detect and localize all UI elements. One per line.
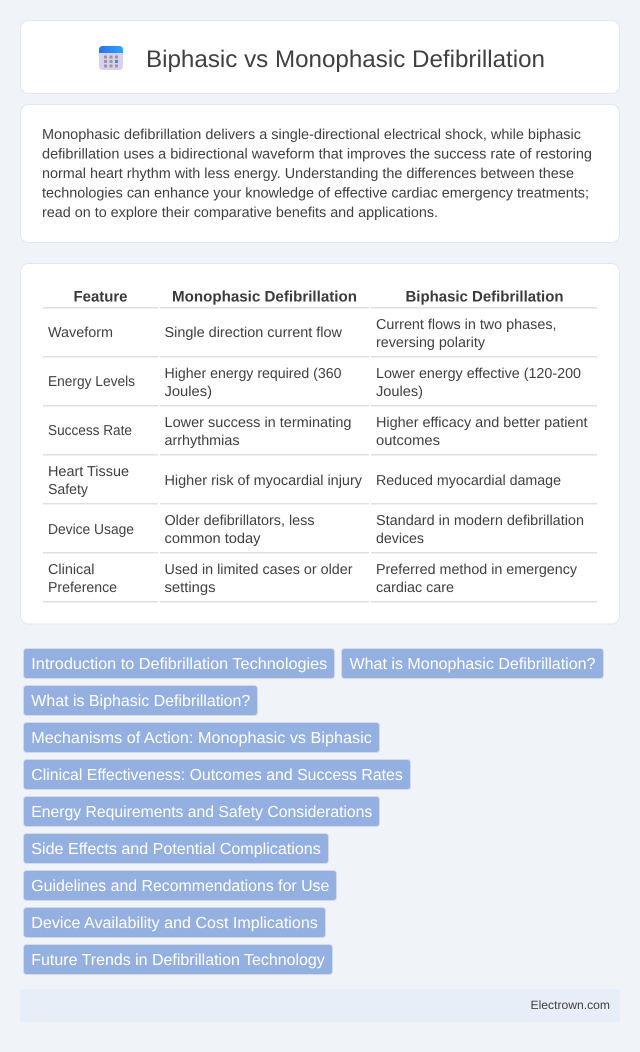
title: Biphasic vs Monophasic Defibrillation <box>146 46 545 73</box>
row: device usage: common today <box>164 531 261 547</box>
intro paragraph: Monophasic defibrillation delivers a single-directional electrical shock, while biphasic <box>42 127 581 143</box>
row: energy levels: Joules) <box>376 384 423 400</box>
chip: future trends <box>24 944 332 974</box>
chip: monophasic: What is Monophasic Defibrillation? <box>350 656 596 673</box>
row: device usage: Device Usage <box>48 522 134 538</box>
row: energy levels: Energy Levels <box>48 374 135 390</box>
row: waveform: Current flows in two phases, <box>376 317 556 333</box>
chip: clinical effectiveness <box>24 760 410 790</box>
chip: mechanisms <box>24 722 380 752</box>
row: success rate: Lower success in terminating <box>164 415 352 431</box>
row: success rate: Success Rate <box>48 423 132 439</box>
row: clinical preference: Preference <box>48 580 117 596</box>
intro paragraph: normal heart rhythm with less energy. Understanding the differences between these <box>42 166 574 182</box>
chip: biphasic: What is Biphasic Defibrillation? <box>31 693 250 710</box>
row: heart tissue safety: Higher risk of myocardial injury <box>164 473 363 489</box>
table header row <box>43 288 597 308</box>
row: waveform: Single direction current flow <box>164 325 343 341</box>
chip: device availability: Device Availability and Cost Implications <box>31 915 318 932</box>
chip: energy requirements <box>24 796 380 826</box>
row: success rate: outcomes <box>376 433 440 449</box>
row: clinical preference: cardiac care <box>376 580 454 596</box>
row: clinical preference: settings <box>164 580 216 596</box>
chip: clinical effectiveness: Clinical Effectiveness: Outcomes and Success Rates <box>31 767 403 784</box>
chip: device availability <box>24 908 326 938</box>
chip: introduction: Introduction to Defibrillation Technologies <box>31 656 327 673</box>
chip: energy requirements: Energy Requirements and Safety Considerations <box>31 804 372 821</box>
table header row: Feature <box>74 288 128 306</box>
row: energy levels: Lower energy effective (120-200 <box>376 366 581 382</box>
chip: guidelines <box>24 870 336 900</box>
row: clinical preference: Clinical <box>48 562 94 578</box>
row: waveform <box>43 317 597 358</box>
chip: guidelines: Guidelines and Recommendations for Use <box>31 878 329 895</box>
row: success rate: Higher efficacy and better patient <box>376 415 588 431</box>
row: heart tissue safety <box>43 464 597 504</box>
row: success rate <box>43 415 597 456</box>
row: energy levels: Higher energy required (360 <box>164 366 342 382</box>
row: success rate: arrhythmias <box>164 433 240 449</box>
topic chips <box>24 648 604 974</box>
intro text panel <box>20 104 620 242</box>
table header row: Monophasic Defibrillation <box>172 288 357 306</box>
row: heart tissue safety: Safety <box>48 482 89 498</box>
intro paragraph: defibrillation uses a bidirectional waveform that improves the success rate of restoring <box>42 146 592 162</box>
header panel <box>20 20 620 94</box>
row: heart tissue safety: Heart Tissue <box>48 464 129 480</box>
row: device usage <box>43 513 597 554</box>
chip: introduction <box>24 648 334 678</box>
row: energy levels: Joules) <box>164 384 212 400</box>
intro paragraph <box>42 127 592 221</box>
row: clinical preference: Used in limited cases or older <box>164 562 353 578</box>
chip: side effects: Side Effects and Potential Complications <box>31 841 321 858</box>
row: heart tissue safety: Reduced myocardial damage <box>376 473 561 489</box>
row: clinical preference: Preferred method in emergency <box>376 562 578 578</box>
comparison table panel <box>20 264 620 624</box>
chip: biphasic <box>24 686 258 716</box>
chip: mechanisms: Mechanisms of Action: Monophasic vs Biphasic <box>31 730 372 747</box>
row: waveform: reversing polarity <box>376 335 486 351</box>
row: energy levels <box>43 366 597 406</box>
chip: monophasic <box>342 648 604 678</box>
icon: calendar grid <box>99 46 123 70</box>
footer <box>20 989 620 1022</box>
row: device usage: devices <box>376 531 424 547</box>
chip: side effects <box>24 834 328 864</box>
footer credit: Electrown.com <box>530 998 610 1012</box>
row: device usage: Older defibrillators, less <box>164 513 314 529</box>
intro paragraph: read on to explore their comparative benefits and applications. <box>42 205 438 221</box>
intro paragraph: technologies can enhance your knowledge of effective cardiac emergency treatments; <box>42 186 589 202</box>
row: waveform: Waveform <box>48 325 113 341</box>
row: clinical preference <box>43 562 597 602</box>
table header row: Biphasic Defibrillation <box>406 288 564 306</box>
chip: future trends: Future Trends in Defibrillation Technology <box>31 952 325 969</box>
row: device usage: Standard in modern defibrillation <box>376 513 584 529</box>
